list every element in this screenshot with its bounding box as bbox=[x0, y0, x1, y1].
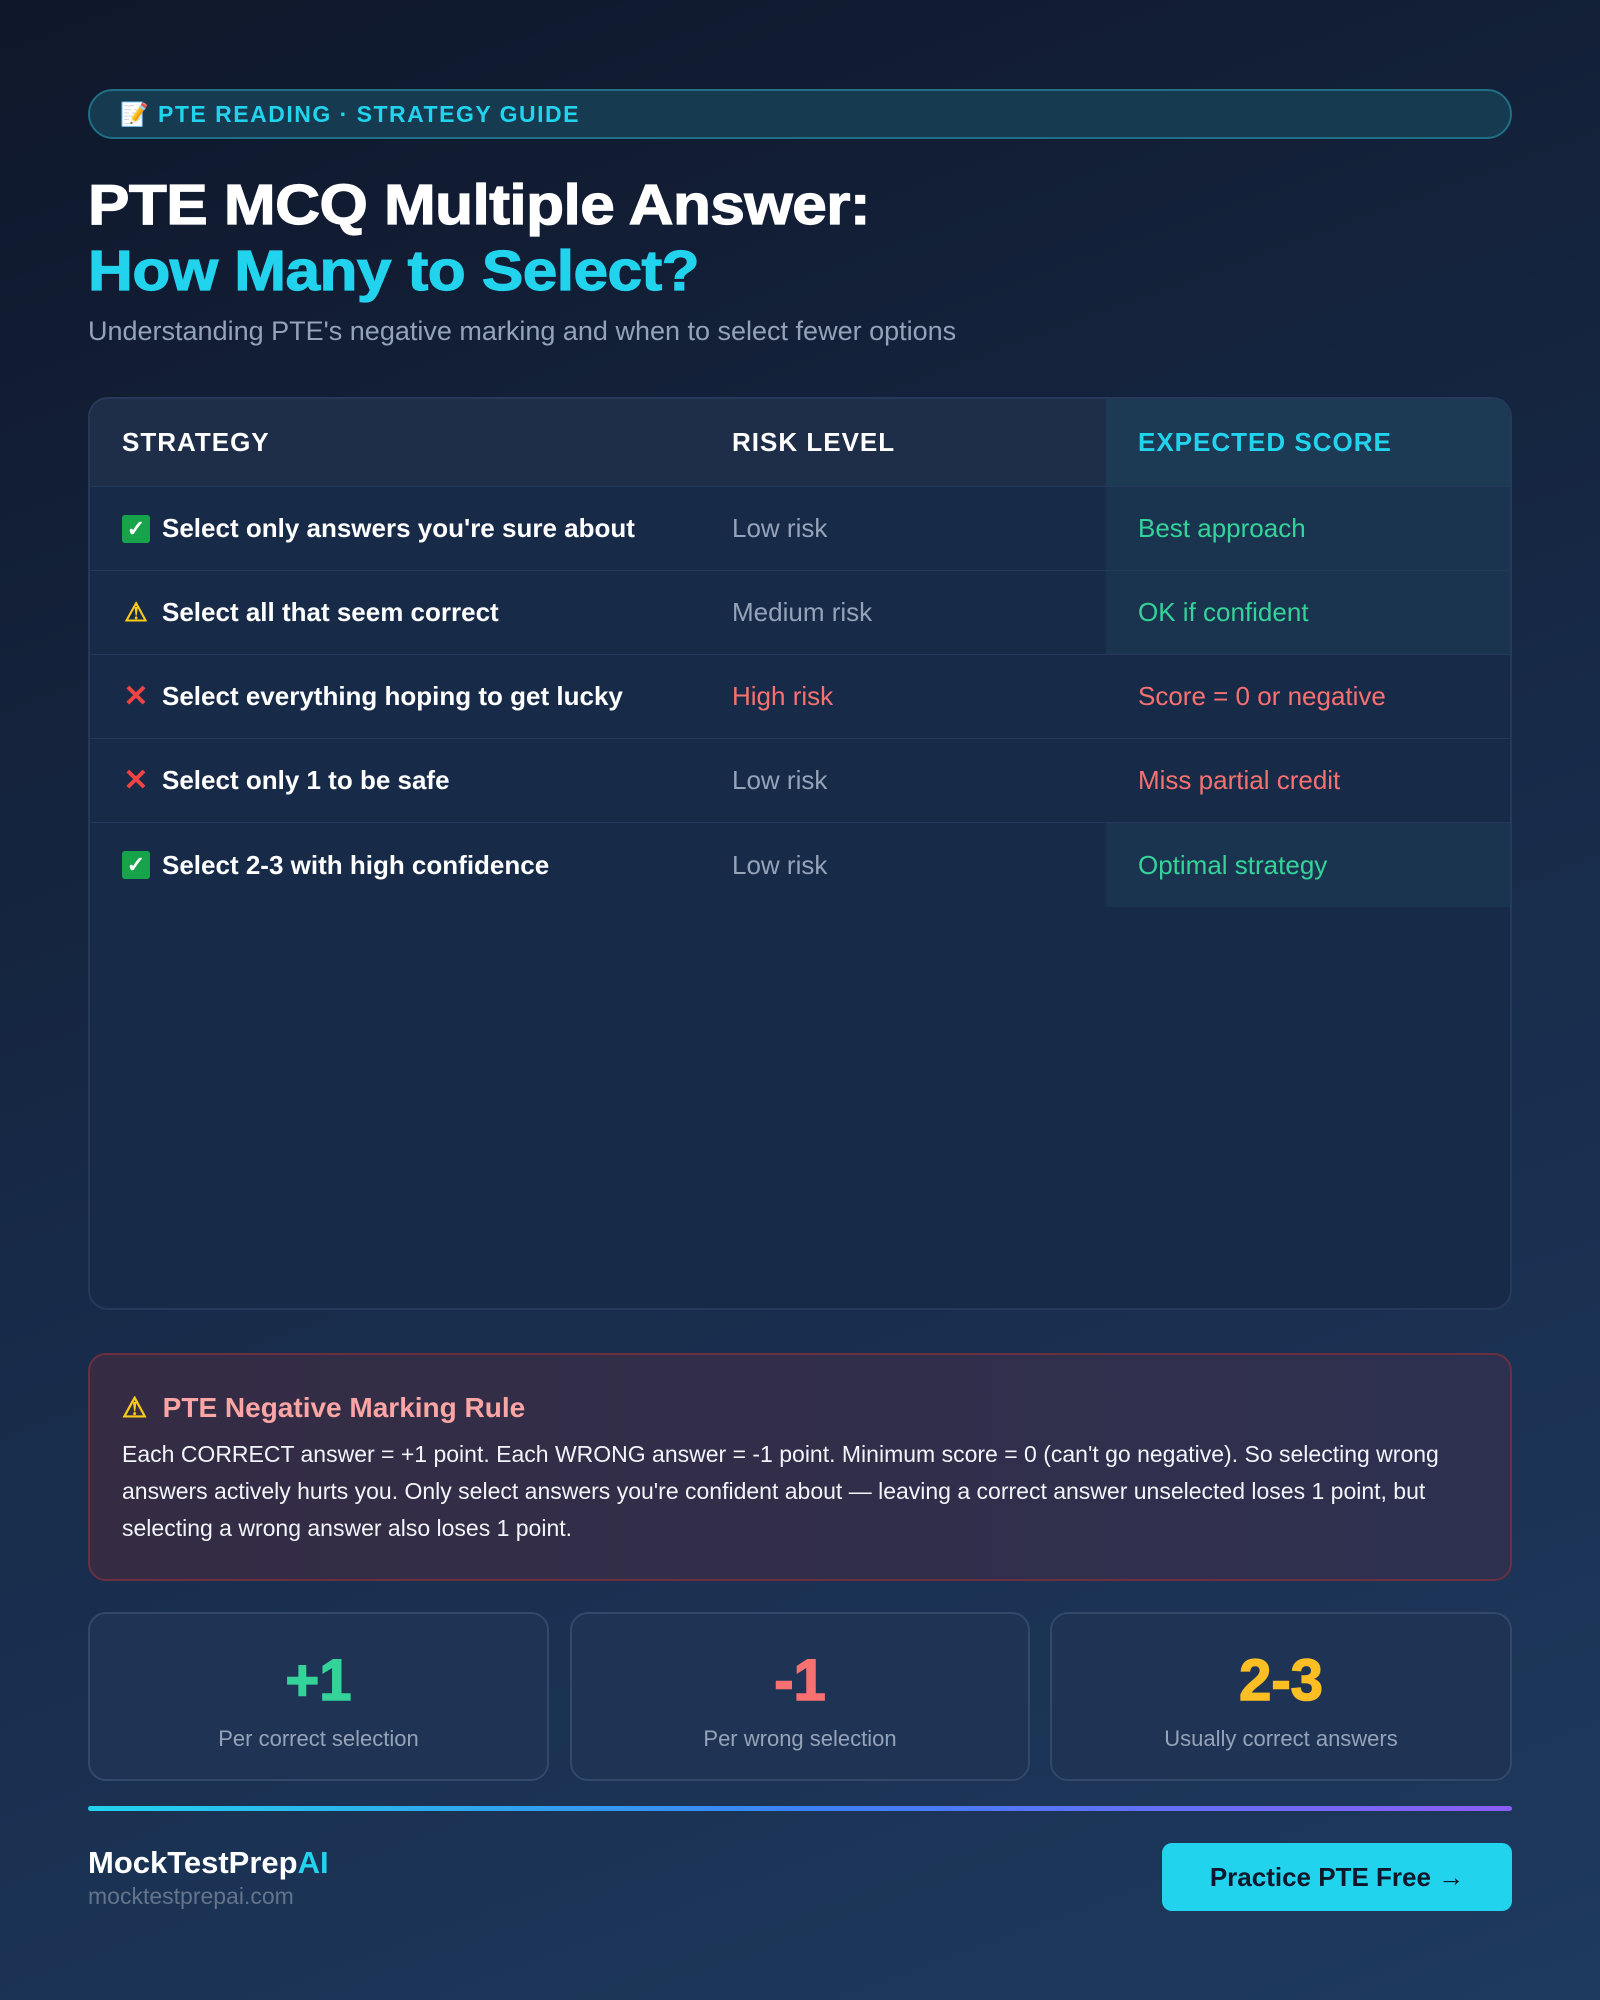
row 5: ✓ bbox=[127, 852, 145, 877]
row 1: Best approach bbox=[1138, 513, 1306, 543]
row 4: ✕ bbox=[123, 764, 149, 797]
row 5 bbox=[122, 823, 1510, 907]
table header: EXPECTED SCORE bbox=[1138, 427, 1392, 457]
row 2: Select all that seem correct bbox=[162, 597, 499, 627]
row 1: Select only answers you're sure about bbox=[162, 513, 635, 543]
panel: strategy table bbox=[88, 397, 1512, 1310]
footer brand: MockTestPrepAI bbox=[88, 1845, 329, 1880]
row 5: Optimal strategy bbox=[1138, 850, 1327, 880]
row 3: High risk bbox=[732, 681, 833, 711]
row 4: Low risk bbox=[732, 765, 827, 795]
stat card: +1: +1 bbox=[285, 1648, 352, 1713]
row 3: ✕ bbox=[123, 680, 149, 713]
row 3: Score = 0 or negative bbox=[1138, 681, 1386, 711]
row 3 bbox=[90, 655, 1514, 739]
row 5: Select 2-3 with high confidence bbox=[162, 850, 549, 880]
stat card: -1 bbox=[570, 1612, 1030, 1781]
row 1: ✓ bbox=[127, 516, 145, 540]
row 2: Medium risk bbox=[732, 597, 872, 627]
row 2 bbox=[90, 571, 1514, 655]
stat card: +1 bbox=[88, 1612, 549, 1781]
stat card: -1: -1 bbox=[774, 1648, 826, 1713]
table header bbox=[90, 399, 1514, 487]
callout text: Each CORRECT answer = +1 point. Each WRONG answer = -1 point. Minimum score = 0 (can't go negative). So selecting wrong answers actively hurts you. Only select answers you're confident about — leaving a correct answer unselected loses 1 point, but selecting a wrong answer also loses 1 point. bbox=[122, 1441, 1439, 1541]
row 1 bbox=[90, 487, 1514, 571]
row 4: Miss partial credit bbox=[1138, 765, 1340, 795]
row 2: OK if confident bbox=[1138, 597, 1309, 627]
row 2: ⚠ bbox=[124, 597, 148, 627]
callout: negative marking rule bbox=[88, 1353, 1512, 1581]
stat card: 2-3: 2-3 bbox=[1239, 1648, 1323, 1713]
row 4: Select only 1 to be safe bbox=[162, 765, 450, 795]
title bbox=[88, 173, 870, 303]
callout heading: ⚠ PTE Negative Marking Rule bbox=[122, 1392, 525, 1423]
table header: STRATEGY bbox=[122, 427, 270, 457]
row 5: Low risk bbox=[732, 850, 827, 880]
badge: 📝 PTE READING · STRATEGY GUIDE bbox=[120, 101, 580, 127]
stat card: 2-3 bbox=[1050, 1612, 1512, 1781]
stat card: +1: Per correct selection bbox=[218, 1726, 419, 1751]
title: PTE MCQ Multiple Answer: bbox=[88, 173, 870, 237]
badge bbox=[88, 89, 1512, 139]
subtitle: Understanding PTE's negative marking and when to select fewer options bbox=[88, 316, 956, 346]
title: How Many to Select? bbox=[88, 239, 699, 303]
row 1: Low risk bbox=[732, 513, 827, 543]
footer brand bbox=[88, 1845, 329, 1909]
table header: RISK LEVEL bbox=[732, 427, 895, 457]
CTA button bbox=[1162, 1843, 1512, 1911]
row 4 bbox=[90, 739, 1514, 823]
stat card: -1: Per wrong selection bbox=[703, 1726, 897, 1751]
row 3: Select everything hoping to get lucky bbox=[162, 681, 623, 711]
stat card: 2-3: Usually correct answers bbox=[1164, 1726, 1398, 1751]
footer brand: mocktestprepai.com bbox=[88, 1883, 294, 1909]
CTA button: Practice PTE Free → bbox=[1210, 1862, 1464, 1892]
